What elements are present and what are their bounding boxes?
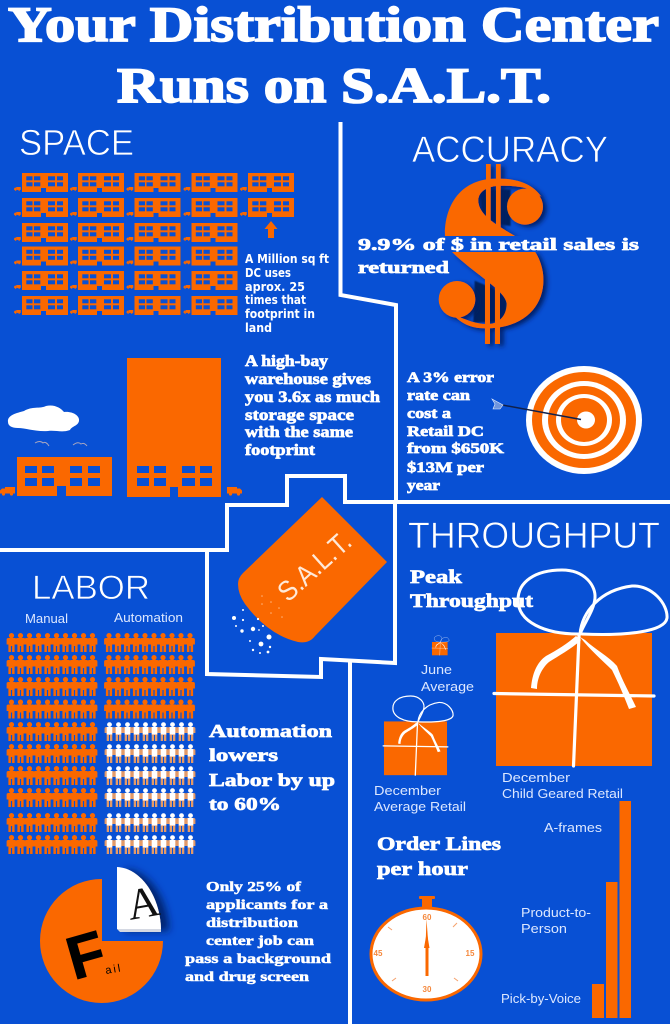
icon: stopwatch [371,896,481,1000]
pictogram: manual workers [7,633,97,854]
label: december average retail: December [374,783,442,798]
building grid [14,173,294,315]
text: error rate: cost a [407,406,452,422]
icon: salt shaker: S.A.L.T. [271,526,357,607]
pie chart: fail vs pass [40,867,163,1003]
pie chart: fail vs pass: A [123,876,163,930]
text: million sq ft: DC uses [245,266,291,280]
icon: salt shaker [232,497,387,654]
text: million sq ft: footprint in [245,307,315,321]
label: december child geared retail: Child Geared Retail [502,786,623,801]
text: high-bay: storage space [245,407,354,424]
text: returned sales [358,235,640,277]
icon: high-bay warehouse [127,358,221,497]
label: manual: Manual [25,611,68,626]
icon: stopwatch: 60 [423,913,432,922]
label: a-frames: A-frames [544,820,603,835]
text: high-bay: footprint [245,442,316,459]
label: automation: Automation [114,610,183,625]
heading: space: SPACE [19,122,134,163]
text: million sq ft [245,252,329,335]
text: high-bay: A high-bay [245,353,328,370]
text: applicants: pass a background [185,952,331,967]
icon: stopwatch: 45 [374,949,383,958]
heading: accuracy: ACCURACY [412,129,608,170]
label: pick-by-voice: Pick-by-Voice [501,991,581,1006]
title: Runs on S.A.L.T. [117,57,551,113]
icon: stopwatch: 15 [466,949,475,958]
label: june average: June [421,662,452,677]
text: order lines per hour: Order Lines [377,834,501,855]
label: product-to-person: Person [521,921,567,936]
label: december child geared retail [502,770,623,801]
icon: left truck [0,487,15,496]
icon: birds [35,442,87,446]
text: million sq ft: times that [245,293,306,307]
text: order lines per hour [377,834,501,880]
icon: cloud [8,405,79,431]
text: automation lowers labor [209,721,335,814]
text: applicants: Only 25% of [206,880,301,895]
label: december child geared retail: December [502,770,571,785]
text: high-bay [245,353,380,459]
text: million sq ft: land [245,321,272,335]
text: peak throughput [410,567,534,612]
text: million sq ft: A Million sq ft [245,252,329,266]
text: order lines per hour: per hour [377,859,469,880]
icon: dollar sign [439,164,543,344]
label: june average [421,662,474,694]
label: product-to-person: Product-to- [521,905,591,920]
text: high-bay: with the same [245,424,353,441]
text: applicants: applicants for a [206,898,328,913]
text: automation lowers labor: to 60% [209,794,281,814]
pie chart: fail vs pass: F [59,918,113,992]
text: automation lowers labor: Labor by up [209,770,335,790]
bar chart: order lines [592,801,631,1018]
label: june average: Average [421,679,474,694]
icon: december child geared gift [494,570,667,766]
text: automation lowers labor: lowers [209,745,278,765]
icon: stopwatch: 30 [423,985,432,994]
label: product-to-person [521,905,591,936]
text: applicants: distribution [206,916,298,931]
text: peak throughput: Peak [410,567,463,588]
text: peak throughput: Throughput [410,591,534,612]
icon: arrow up [264,221,278,238]
text: million sq ft: aprox. 25 [245,280,305,294]
text: error rate: from $650K [407,441,504,457]
text: applicants: center job can [206,934,314,949]
text: error rate: rate can [407,388,471,404]
icon: low warehouse [17,457,112,496]
icon: december average gift [383,696,453,775]
text: returned sales: returned [358,258,450,277]
label: december average retail: Average Retail [374,799,466,814]
text: applicants: and drug screen [185,970,309,985]
label: december average retail [374,783,466,814]
text: high-bay: you 3.6x as much [245,389,380,406]
text: returned sales: 9.9% of $ in retail sales is [358,235,640,254]
heading: throughput: THROUGHPUT [408,515,660,556]
icon: june gift [432,636,449,655]
text: error rate: A 3% error [407,370,494,386]
text: error rate: Retail DC [407,424,484,440]
text: automation lowers labor: Automation [209,721,332,741]
text: error rate [407,370,504,494]
heading: labor: LABOR [32,569,150,607]
title [8,0,659,113]
text: applicants [185,880,331,985]
icon: target with dart [492,366,642,474]
text: high-bay: warehouse gives [245,371,371,388]
pie chart: fail vs pass: ail [104,962,123,977]
pictogram: automation workers [104,633,195,854]
icon: right truck [227,487,242,496]
text: error rate: $13M per [407,460,484,476]
text: error rate: year [407,478,440,494]
